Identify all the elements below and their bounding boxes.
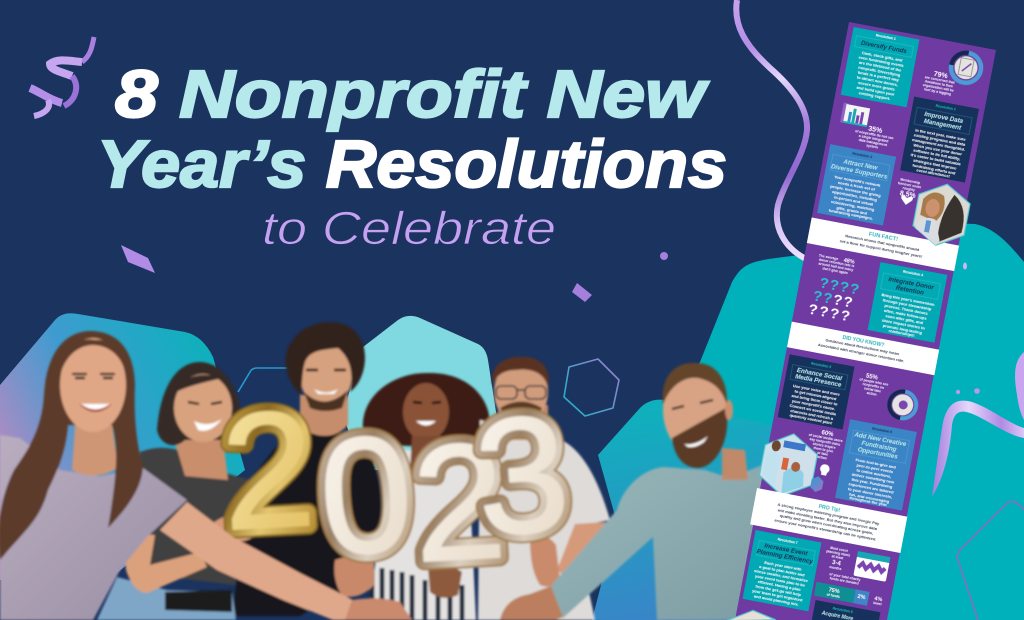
panel 6 body: fun, and encouraging xyxy=(849,491,890,504)
panel 3 body: gifts, grants and xyxy=(836,205,868,216)
person: woman in dark sweater xyxy=(97,362,258,620)
panel: resolution 8 xyxy=(812,600,880,620)
panel: resolution 6 add new creative fundraising xyxy=(835,419,917,511)
stat: 60 percent with lightbulb: 60% xyxy=(821,430,834,438)
panel: resolution 3 attract new diverse supporters xyxy=(817,144,896,225)
stat: 8.5 percent with heart: Membership xyxy=(900,177,920,185)
panel 2 heading: Improve Data xyxy=(924,111,964,125)
panel 1 heading: Diversify Funds xyxy=(860,40,908,55)
panel 3 body: opportunities, including xyxy=(832,189,878,202)
photo: hexagon bottom xyxy=(727,606,777,620)
balloon: silver second 2: 2 xyxy=(408,408,510,596)
panel 3 heading: Diverse Supporters xyxy=(830,163,888,181)
stat: 35 percent: 35% xyxy=(868,126,883,135)
panel 4 body: share impact stories to xyxy=(881,317,926,331)
panel 5 body: quarterly content plan! xyxy=(789,412,833,425)
photo: hexagon volunteers xyxy=(756,429,820,501)
stat: 3 to 4 months: planning starts xyxy=(826,549,851,558)
stat: event budget bar: 2% xyxy=(857,594,866,601)
panel 4 body: promote long-lasting xyxy=(882,323,923,335)
panel 7 body: and avoid planning mix. xyxy=(754,593,799,607)
balloon: silver second 2: 2 xyxy=(408,408,510,596)
panel 6 body: this year. Fundraising xyxy=(851,477,893,489)
panel 3 body: volunteering, matching xyxy=(831,199,875,212)
stat: event budget bar: 4% xyxy=(874,596,883,603)
stat: 8.5 percent with heart: 8.5% xyxy=(899,190,917,200)
balloon: silver second 2: 2 xyxy=(408,408,510,596)
stat: 79 percent: hurt by a lagging xyxy=(924,87,951,96)
title xyxy=(97,57,727,254)
confetti: dots on teal xyxy=(956,388,980,394)
band: pro tip: quality and grow when coordinating across goals, xyxy=(779,513,874,536)
person: man with glasses xyxy=(478,357,610,620)
icon: lightbulb xyxy=(819,464,830,476)
stat: event budget bar: of your total charity xyxy=(829,572,861,582)
panel 5 body: and bring them closer to xyxy=(791,393,839,407)
icon: bar chart card xyxy=(840,102,870,127)
panel 4 body: relationships! xyxy=(888,328,915,338)
panel 3 body: fundraising campaigns. xyxy=(828,208,874,221)
balloon: gold 2: 2 xyxy=(217,376,319,564)
stat: event budget bar: 75% xyxy=(828,587,840,595)
stat: 60 percent with lightbulb: action xyxy=(817,455,827,461)
panel: resolution 4 integrate donor retention xyxy=(868,262,947,343)
panel 1 body: funds is a perfect way xyxy=(857,70,900,82)
stat: 79 percent xyxy=(922,69,957,97)
stat: 60 percent with lightbulb: stories inspire xyxy=(812,442,836,450)
panel 6 body: to your donor interests, xyxy=(848,486,893,499)
confetti: diamond centre xyxy=(572,283,592,302)
icon: question marks: ???? xyxy=(807,301,851,325)
panel 7 heading: Planning Efficiency xyxy=(756,548,814,566)
panel 2 body: In the next year, make sure xyxy=(915,127,967,142)
stat: 48 percent: don't give again xyxy=(822,266,848,275)
stat: 35 percent xyxy=(853,123,895,152)
stat: 48 percent: donor retention rate is xyxy=(819,258,855,268)
icon: clipboard donut xyxy=(948,50,984,85)
panel: resolution 2 improve data management xyxy=(900,97,979,183)
balloon: silver 3: 3 xyxy=(468,380,576,571)
stat: 60 percent with lightbulb: or take xyxy=(817,451,829,457)
stat: 79 percent: are concerned that xyxy=(924,75,956,85)
panel 1 body: to attract new donors, xyxy=(856,75,898,87)
photo: hexagon two women talking xyxy=(910,179,973,250)
panel 2 body: it's easier to build valuable xyxy=(910,152,962,167)
outline hexagon: small blue xyxy=(238,368,290,392)
stat: event budget bar: of funds xyxy=(826,592,840,599)
panel 5 body: channels and refresh a xyxy=(790,408,834,421)
stat: 55 percent: of people who see xyxy=(859,377,889,387)
stat: 55 percent: social take xyxy=(864,386,881,394)
balloon: silver 0: 0 xyxy=(314,400,418,590)
band: pro tip: ensure your nonprofit's stewardship can be optimized. xyxy=(774,517,877,542)
balloon: silver 0: 0 xyxy=(314,400,418,590)
panel 3 body: people. Increase the giving xyxy=(830,183,882,198)
panel 1 body: secure more grants xyxy=(858,80,896,92)
panel 3 label: Resolution 3 xyxy=(852,151,873,159)
band: fun fact: set a floor for support during tougher years! xyxy=(839,238,923,259)
icon: heart xyxy=(900,195,913,206)
decoration: small gradient hexagon xyxy=(809,475,824,493)
stat: 3 to 4 months: months xyxy=(829,565,842,571)
stat: 48 percent xyxy=(816,253,856,276)
stat: 3 to 4 months: 3-4 xyxy=(831,560,842,568)
balloon: gold 2: 2 xyxy=(217,376,319,564)
panel 4 heading: Retention xyxy=(895,285,925,297)
panel 1 body: and build upon your xyxy=(856,85,895,97)
panel: resolution 5 enhance social media presence xyxy=(778,354,855,430)
band: did you know xyxy=(787,322,939,375)
stat: 60 percent with lightbulb xyxy=(802,428,844,478)
panel 2 body: software to its full ability, xyxy=(913,147,961,161)
icon: heart donut xyxy=(887,389,919,421)
icon: calendar xyxy=(853,551,890,582)
confetti: diamond left xyxy=(121,245,155,273)
stat: event budget bar xyxy=(814,570,887,609)
panel: resolution 1 diversify funding xyxy=(841,27,919,107)
panel 6 body: experiences are tailored xyxy=(848,481,895,495)
panel 4 body: soon after gifts, and xyxy=(885,313,924,325)
title line 3: to Celebrate xyxy=(262,202,556,254)
panel 3 body: in-person and virtual xyxy=(834,194,874,207)
stat: 79 percent: 79% xyxy=(933,71,949,81)
stat: event budget bar: funds are donated xyxy=(829,576,859,586)
panel 2 body: event attendance! xyxy=(916,167,950,179)
stat: 55 percent: action xyxy=(866,391,877,397)
panel 2 heading: Management xyxy=(923,118,963,132)
confetti: diamond on teal xyxy=(963,262,967,270)
person: man with curly hair xyxy=(232,322,381,616)
panel 5 label: Resolution 5 xyxy=(811,361,832,369)
panel 7 body: your team to get organized xyxy=(752,588,803,603)
outline hexagon: gradient xyxy=(564,359,619,416)
balloon numerals 2023 xyxy=(217,376,576,596)
shape: large teal blob right xyxy=(640,224,1024,620)
stat: 55 percent: 55% xyxy=(865,373,879,382)
panel 2 label: Resolution 2 xyxy=(935,104,956,112)
balloon: silver 3: 3 xyxy=(468,380,576,571)
panel 1 body: existing support. xyxy=(858,90,891,101)
title line 1: 8 Nonprofit New xyxy=(115,57,709,132)
panel 7 label: Resolution 7 xyxy=(777,537,798,545)
confetti: top-left ribbon curl xyxy=(30,37,94,116)
panel 6 body: peer-to-peer events xyxy=(856,462,894,474)
panel 6 body: From text-to-give and xyxy=(855,457,897,470)
panel 7 body: efficient. Having a plan xyxy=(757,579,802,592)
panel 4 body: often, make follow-ups xyxy=(883,308,928,321)
panel 7 body: stress smaller, and formalize xyxy=(754,568,809,583)
band: pro tip xyxy=(750,488,907,553)
panel 4 body: process. Thank donors xyxy=(884,303,929,316)
panel 5 heading: Enhance Social xyxy=(796,367,843,382)
band: did you know: DID YOU KNOW? xyxy=(842,335,885,349)
panel 5 body: to get mission-aligned xyxy=(794,388,837,401)
panel 8 label: Resolution 8 xyxy=(832,606,853,614)
stat: 8.5 percent with heart xyxy=(894,177,922,207)
panel 7 body: from the get-go will help xyxy=(755,584,802,597)
panel 6 body: deliver something new xyxy=(851,472,895,485)
stat: 35 percent: of nonprofits do not use xyxy=(855,129,894,140)
panel 1 body: Cash, stock gifts, and xyxy=(861,50,903,63)
panel 7 body: a goal to plan better and xyxy=(759,564,806,578)
stat: 79 percent: organization will be xyxy=(922,83,954,93)
stat: 55 percent xyxy=(857,372,890,399)
stat: event budget bar: lower xyxy=(873,601,883,607)
band: did you know: Associated with stronger donor retention rate. xyxy=(818,342,905,363)
band: fun fact: Research shows that nonprofits should xyxy=(845,233,920,252)
title line 2: Year’s Resolutions xyxy=(97,127,727,202)
infographic preview, rotated xyxy=(727,24,999,620)
outline hexagon: bottom right xyxy=(957,502,1024,620)
band: pro tip: A strong employee matching program and Google Pay xyxy=(777,502,880,526)
panel 4 label: Resolution 4 xyxy=(903,270,923,277)
stat: 48 percent: around half and many xyxy=(818,262,854,272)
stat: 3 to 4 months: Most event xyxy=(830,546,849,553)
panel 1 label: Resolution 1 xyxy=(875,33,896,41)
panel 3 body: needs a fresh set of xyxy=(838,180,876,192)
stat: 35 percent: system xyxy=(866,143,878,150)
icon: question marks: ???? xyxy=(812,287,854,311)
panel 7 heading: Increase Event xyxy=(764,543,809,558)
ribbon: right lower xyxy=(932,401,1024,497)
panel 2 body: When you use your donor xyxy=(913,142,963,157)
panel 2 body: strategies that improve xyxy=(913,158,958,171)
icon: question marks xyxy=(807,273,861,326)
stat: 48 percent: 48% xyxy=(843,258,855,266)
panel 7 body: your event team plan to be xyxy=(755,573,806,588)
band: fun fact: FUN FACT! xyxy=(868,232,898,243)
panel 4 heading: Integrate Donor xyxy=(888,276,935,292)
panel 4 body: through your stewardship xyxy=(882,297,932,312)
panel 6 body: throughout the year. xyxy=(849,495,888,507)
stat: 3 to 4 months: at least xyxy=(831,554,844,561)
person: bearded man in denim shirt xyxy=(500,363,775,620)
band: pro tip: PRO Tip! xyxy=(818,504,841,514)
stat: 8.5 percent with heart: turnover costs xyxy=(898,181,922,189)
stat: 60 percent with lightbulb: of social media users xyxy=(808,433,843,443)
balloon: gold 2: 2 xyxy=(217,376,319,564)
shape: left gradient hexagon xyxy=(0,313,245,580)
balloon: silver 3: 3 xyxy=(468,380,576,571)
panel 6 label: Resolution 6 xyxy=(872,427,893,434)
shape: light teal hexagon xyxy=(343,316,498,470)
stat: 8.5 percent with heart: roughly xyxy=(902,186,915,192)
stat: 55 percent: nonprofits on xyxy=(862,382,884,390)
stat: 48 percent: The average xyxy=(818,254,839,261)
panel 6 heading: Opportunities xyxy=(857,446,899,461)
panel 4 body: Bring this year's momentum xyxy=(881,292,935,307)
infographic page background xyxy=(735,22,996,620)
panel 5 body: Connect on social media xyxy=(789,403,837,417)
confetti: dot xyxy=(660,252,668,260)
panel 1 body: even fundraising events xyxy=(858,54,905,68)
panel 3 heading: Attract New xyxy=(842,158,879,172)
band: fun fact xyxy=(807,217,959,271)
panel 5 body: your nonprofit's cause. xyxy=(792,398,836,411)
panel 2 body: existing programs and data xyxy=(913,132,966,147)
stat: 3 to 4 months xyxy=(823,545,851,572)
people group photo xyxy=(0,322,775,620)
ribbon: long curling lavender xyxy=(736,0,807,259)
panel 6 body: to online auctions, xyxy=(856,467,892,479)
person: woman in front with long hair xyxy=(0,331,412,620)
person: woman with curly red hair xyxy=(363,373,490,620)
panel: resolution 7 increase event planning xyxy=(743,530,821,611)
panel 5 heading: Media Presence xyxy=(795,373,842,389)
panel 1 body: are the lifeblood of the xyxy=(859,60,903,73)
band: did you know: Guidance about Resolutions may mean xyxy=(825,337,900,356)
stat: 79 percent: donations to their xyxy=(925,79,954,89)
stat: 35 percent: a single integrated xyxy=(858,134,889,143)
panel 2 body: management are thoughtful. xyxy=(912,137,966,152)
panel 6 heading: Fundraising xyxy=(861,440,897,453)
stat: 60 percent with lightbulb: say nonprofit video xyxy=(809,437,841,447)
stat: 60 percent with lightbulb: them to give xyxy=(813,446,834,454)
panel 2 body: fundraising efforts and xyxy=(912,162,956,176)
shape: blue gradient hexagon xyxy=(592,400,790,620)
icon: question marks: ???? xyxy=(818,274,861,298)
ribbon: right edge xyxy=(1015,352,1024,420)
band: pro tip: will make donating faster. But they also improve data xyxy=(776,507,878,531)
panel 6 heading: Add New Creative xyxy=(853,431,907,448)
panel 5 body: Use your voice and more xyxy=(793,383,841,397)
panel 3 body: Your nonprofit's network xyxy=(834,174,882,188)
panel 7 body: Each year start with xyxy=(764,560,803,572)
balloon: silver 0: 0 xyxy=(314,400,418,590)
panel 1 body: nonprofit. Diversifying xyxy=(858,65,901,78)
stat: 35 percent: data management xyxy=(858,138,888,147)
